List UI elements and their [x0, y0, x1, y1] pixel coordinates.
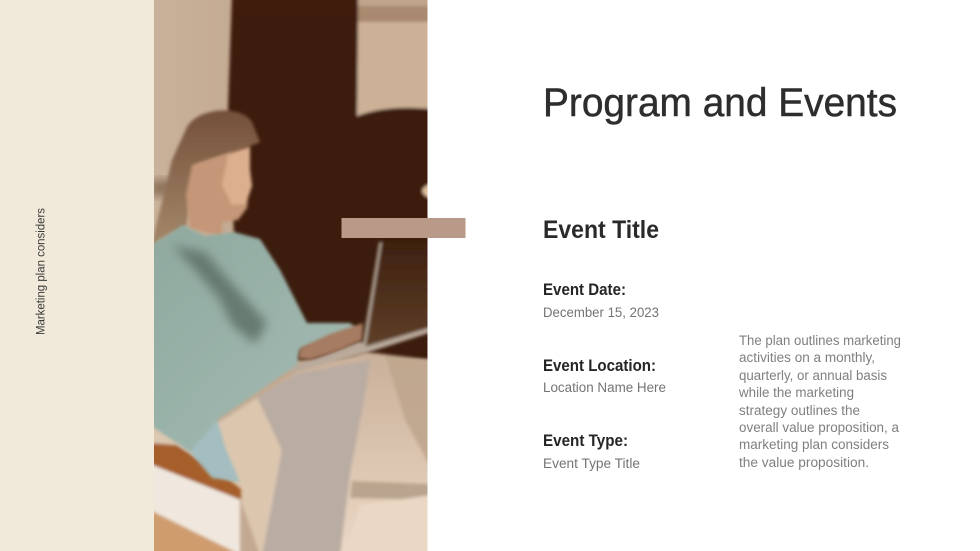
- description paragraph: overall value proposition, a: [739, 420, 899, 435]
- photo sweater shadow: [173, 246, 267, 344]
- photo bench and floor: [150, 420, 243, 551]
- event location block: [543, 356, 666, 395]
- description paragraph: activities on a monthly,: [739, 350, 875, 365]
- description paragraph: while the marketing: [738, 385, 854, 400]
- photo dark shadow: [228, 0, 432, 360]
- panel: beige sidebar: [0, 0, 154, 551]
- description paragraph: marketing plan considers: [739, 437, 889, 452]
- photo blanket: [214, 352, 432, 551]
- event date block: December 15, 2023: [543, 305, 659, 320]
- photo laptop: [288, 242, 432, 374]
- event type block: [543, 431, 640, 471]
- photo face: [186, 146, 252, 236]
- event location block: Event Location:: [543, 356, 656, 375]
- event date block: Event Date:: [543, 280, 626, 299]
- description paragraph: [738, 333, 901, 470]
- event title heading: Event Title: [543, 216, 659, 244]
- event type block: Event Type:: [543, 431, 628, 450]
- event date block: [543, 280, 659, 320]
- title: Program and Events: [543, 81, 897, 125]
- event type block: Event Type Title: [543, 456, 640, 471]
- description paragraph: strategy outlines the: [739, 403, 860, 418]
- photo hands: [298, 323, 363, 360]
- accent bar: [342, 218, 466, 238]
- description paragraph: the value proposition.: [739, 455, 869, 470]
- photo: woman using a laptop: [150, 0, 432, 551]
- sidebar vertical label: Marketing plan considers: [36, 208, 48, 335]
- photo wall shadow band: [154, 175, 168, 201]
- photo sweater: [150, 225, 358, 482]
- photo wall: [154, 0, 428, 551]
- description paragraph: quarterly, or annual basis: [739, 368, 887, 383]
- description paragraph: The plan outlines marketing: [739, 333, 901, 348]
- photo hair: [150, 110, 260, 250]
- event location block: Location Name Here: [543, 380, 666, 395]
